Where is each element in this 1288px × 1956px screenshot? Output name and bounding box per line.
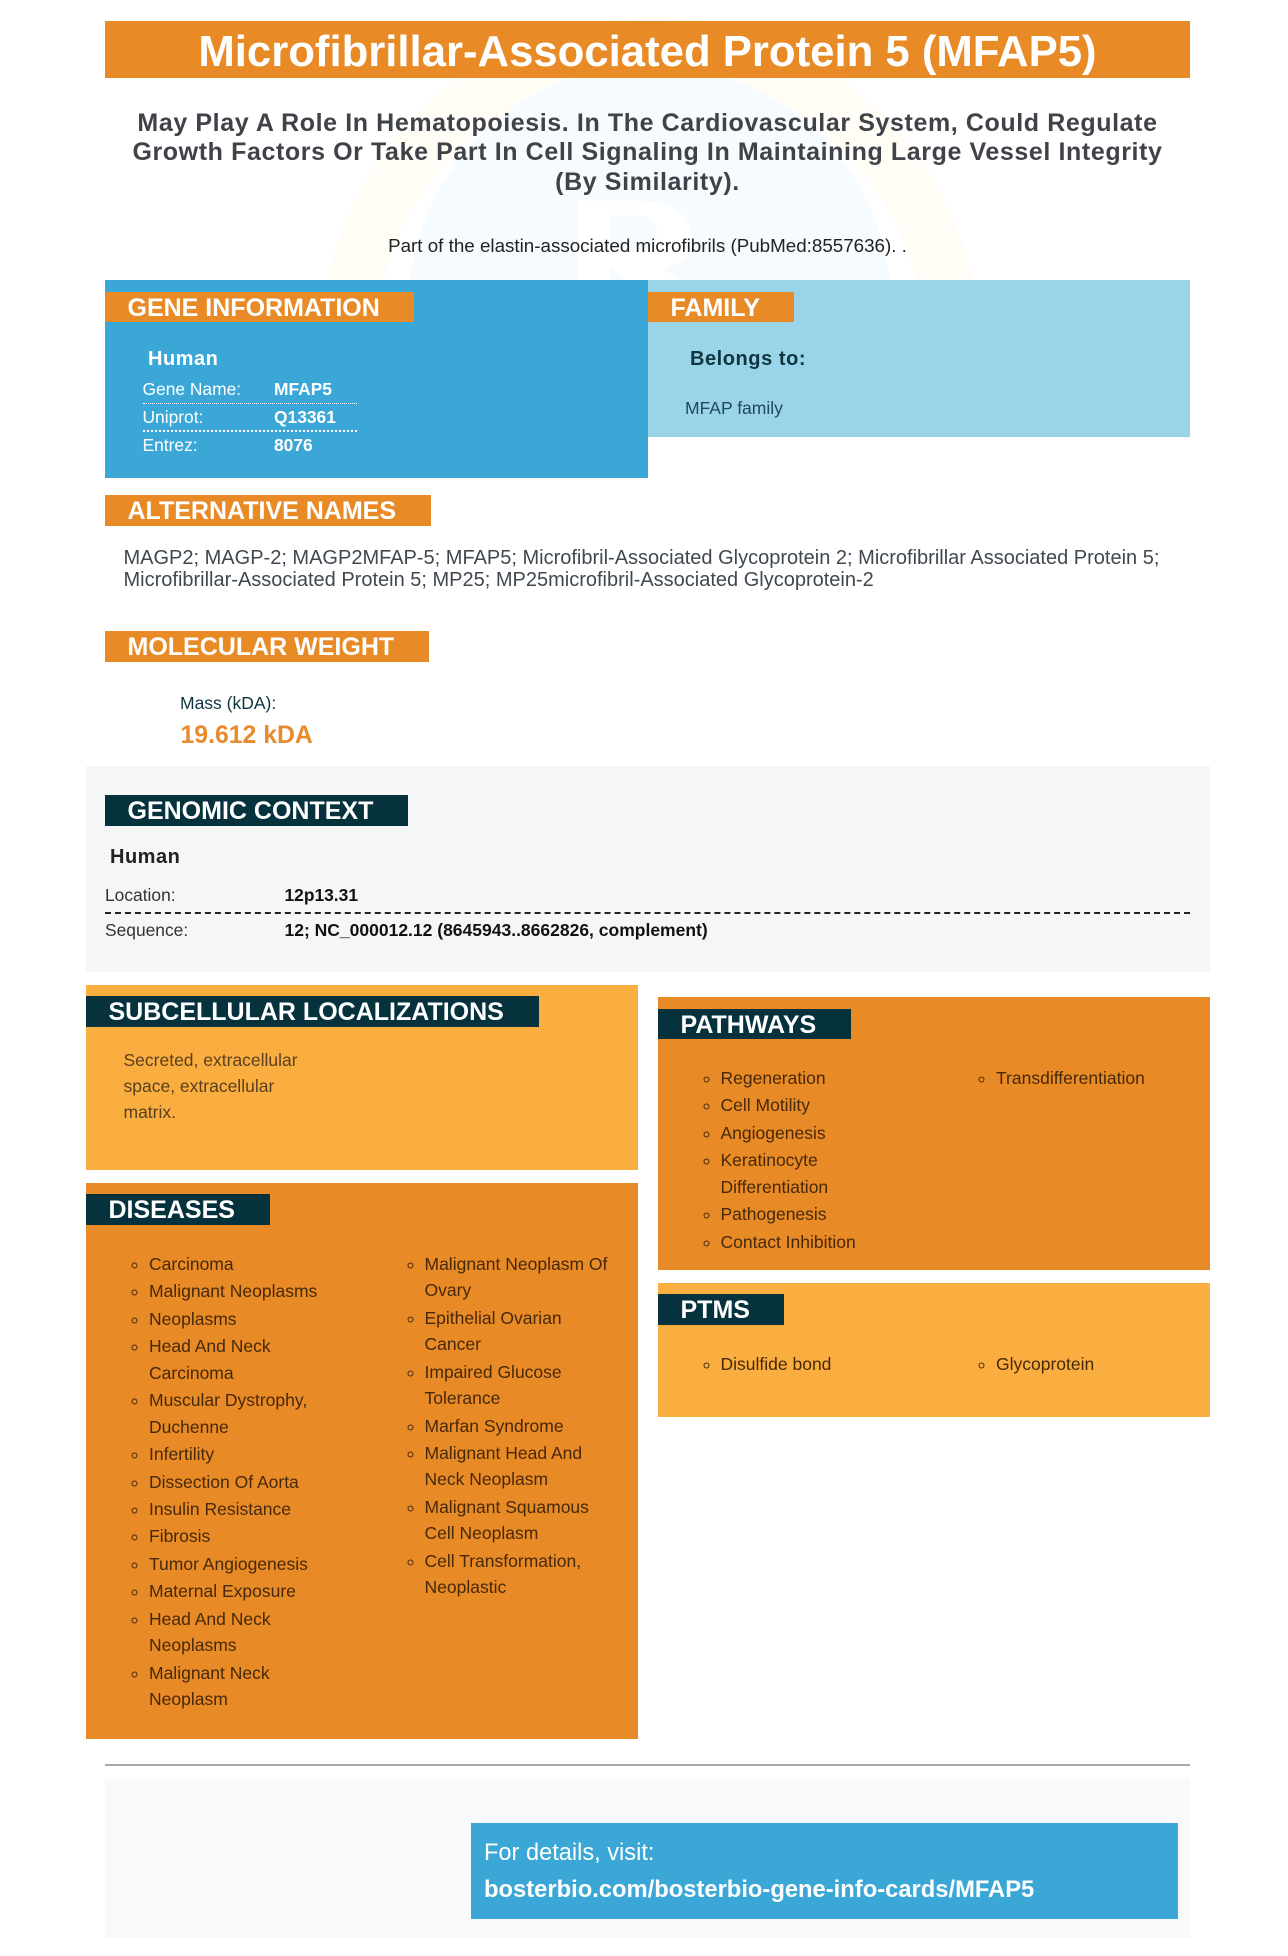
disease list column 1: Tumor Angiogenesis — [149, 1554, 308, 1574]
heading: family — [648, 292, 794, 322]
panel: diseases — [86, 1183, 638, 1739]
alternative names text: MAGP2; MAGP-2; MAGP2MFAP-5; MFAP5; Microfibril-Associated Glycoprotein 2; Microfibrillar Associated Protein 5; — [124, 547, 1159, 569]
disease list column 1: Duchenne — [149, 1417, 229, 1437]
disease list column 1: Head And Neck — [149, 1609, 271, 1629]
disease list column 2: Cell Transformation, — [424, 1551, 581, 1571]
disease list column 1: Maternal Exposure — [149, 1581, 296, 1601]
disease list column 1: Muscular Dystrophy, — [149, 1390, 307, 1410]
sequence row: 12; NC_000012.12 (8645943..8662826, complement) — [284, 920, 708, 940]
heading: family: FAMILY — [670, 294, 760, 322]
panel: genomic context — [86, 766, 1210, 972]
disease list column 1: Dissection Of Aorta — [149, 1472, 299, 1492]
background watermark logo — [328, 18, 972, 280]
disease list column 1: Fibrosis — [149, 1526, 210, 1546]
location row — [105, 885, 358, 905]
pathways list column 1 — [704, 1068, 856, 1252]
heading: subcellular localizations: SUBCELLULAR LOCALIZATIONS — [108, 998, 504, 1026]
mass label: Mass (kDA): — [180, 693, 276, 713]
panel: gene information — [105, 280, 648, 478]
disease list column 1: Infertility — [149, 1444, 214, 1464]
gene name row — [142, 379, 332, 399]
heading: ptms — [658, 1294, 784, 1325]
details url: bosterbio.com/bosterbio-gene-info-cards/MFAP5 — [484, 1876, 1034, 1903]
disease list column 1: Malignant Neck — [149, 1663, 270, 1683]
gene name row: Gene Name: — [142, 379, 241, 399]
description text: Part of the elastin-associated microfibrils (PubMed:8557636). . — [388, 235, 907, 256]
subtitle: function summary: Growth Factors Or Take Part In Cell Signaling In Maintaining Large Vessel Integrity — [132, 138, 1163, 166]
family value: MFAP family — [685, 398, 783, 418]
disease list column 2: Marfan Syndrome — [424, 1416, 564, 1436]
heading: alternative names: ALTERNATIVE NAMES — [128, 497, 396, 525]
heading: diseases — [86, 1194, 270, 1225]
disease list column 1: Neoplasms — [149, 1635, 237, 1655]
location row: Location: — [105, 885, 176, 905]
pathways list column 1: Regeneration — [720, 1068, 826, 1088]
uniprot row: Uniprot: — [142, 407, 203, 427]
uniprot row: Q13361 — [274, 407, 336, 427]
heading: pathways — [658, 1009, 851, 1039]
sequence row: Sequence: — [105, 920, 188, 940]
species label: Human — [148, 348, 218, 370]
disease list column 2: Malignant Head And — [424, 1443, 582, 1463]
location row: 12p13.31 — [284, 885, 358, 905]
alternative names text — [124, 547, 1159, 591]
pathways list column 1: Keratinocyte — [720, 1150, 818, 1170]
localization text: Secreted, extracellular — [124, 1050, 298, 1070]
disease list column 2: Cancer — [424, 1334, 481, 1354]
disease list column 1: Carcinoma — [149, 1254, 234, 1274]
disease list column 1: Carcinoma — [149, 1363, 234, 1383]
localization text: space, extracellular — [124, 1076, 274, 1096]
alternative names text: Microfibrillar-Associated Protein 5; MP25; MP25microfibril-Associated Glycoprotein-2 — [124, 569, 874, 591]
gene name row: MFAP5 — [274, 379, 332, 399]
pathways list column 1: Angiogenesis — [720, 1123, 826, 1143]
belongs to label: Belongs to: — [690, 348, 806, 370]
panel: pathways — [658, 997, 1210, 1270]
disease list column 1: Insulin Resistance — [149, 1499, 291, 1519]
entrez row: Entrez: — [142, 435, 198, 455]
localization text: matrix. — [124, 1102, 176, 1122]
disease list column 1: Head And Neck — [149, 1336, 271, 1356]
disease list column 1: Neoplasms — [149, 1309, 237, 1329]
disease list column 2: Impaired Glucose — [424, 1362, 562, 1382]
localization text — [124, 1050, 298, 1122]
ptm list column 1: Disulfide bond — [720, 1354, 831, 1374]
heading: molecular weight: MOLECULAR WEIGHT — [128, 633, 394, 661]
pathways list column 2: Transdifferentiation — [996, 1068, 1145, 1088]
subtitle: function summary — [132, 109, 1163, 196]
panel: footer — [105, 1779, 1190, 1938]
heading: gene information: GENE INFORMATION — [128, 294, 380, 322]
disease list column 1: Neoplasm — [149, 1689, 228, 1709]
pathways list column 1: Differentiation — [720, 1177, 828, 1197]
panel: subcellular localizations — [86, 985, 638, 1170]
mass value: 19.612 kDA — [180, 722, 313, 748]
panel: family — [648, 280, 1190, 437]
disease list column 2: Epithelial Ovarian — [424, 1308, 562, 1328]
details label: For details, visit: — [484, 1840, 654, 1866]
entrez row: 8076 — [274, 435, 313, 455]
disease list column 2: Tolerance — [424, 1388, 500, 1408]
subtitle: function summary: May Play A Role In Hematopoiesis. In The Cardiovascular System, Could Regulate — [137, 109, 1158, 137]
disease list column 1 — [132, 1254, 317, 1709]
pathways list column 1: Cell Motility — [720, 1095, 810, 1115]
species label: Human — [110, 846, 180, 868]
callout: details link — [471, 1823, 1178, 1919]
pathways list column 1: Pathogenesis — [720, 1204, 827, 1224]
disease list column 2: Neoplastic — [424, 1577, 506, 1597]
panel: ptms — [658, 1283, 1210, 1417]
ptm list column 2: Glycoprotein — [996, 1354, 1094, 1374]
disease list column 2 — [408, 1254, 608, 1597]
disease list column 2: Malignant Squamous — [424, 1497, 589, 1517]
disease list column 2: Malignant Neoplasm Of — [424, 1254, 607, 1274]
heading: genomic context: GENOMIC CONTEXT — [128, 797, 373, 825]
subtitle: function summary: (By Similarity). — [555, 168, 740, 196]
heading: ptms: PTMS — [680, 1296, 750, 1324]
pathways list column 1: Contact Inhibition — [720, 1232, 856, 1252]
disease list column 2: Cell Neoplasm — [424, 1523, 538, 1543]
heading: pathways: PATHWAYS — [680, 1011, 816, 1039]
uniprot row — [142, 407, 336, 427]
title banner: Microfibrillar-Associated Protein 5 (MFAP5) — [198, 27, 1097, 76]
disease list column 1: Malignant Neoplasms — [149, 1281, 317, 1301]
disease list column 2: Ovary — [424, 1280, 471, 1300]
heading: diseases: DISEASES — [108, 1196, 235, 1224]
disease list column 2: Neck Neoplasm — [424, 1469, 548, 1489]
entrez row — [142, 435, 313, 455]
